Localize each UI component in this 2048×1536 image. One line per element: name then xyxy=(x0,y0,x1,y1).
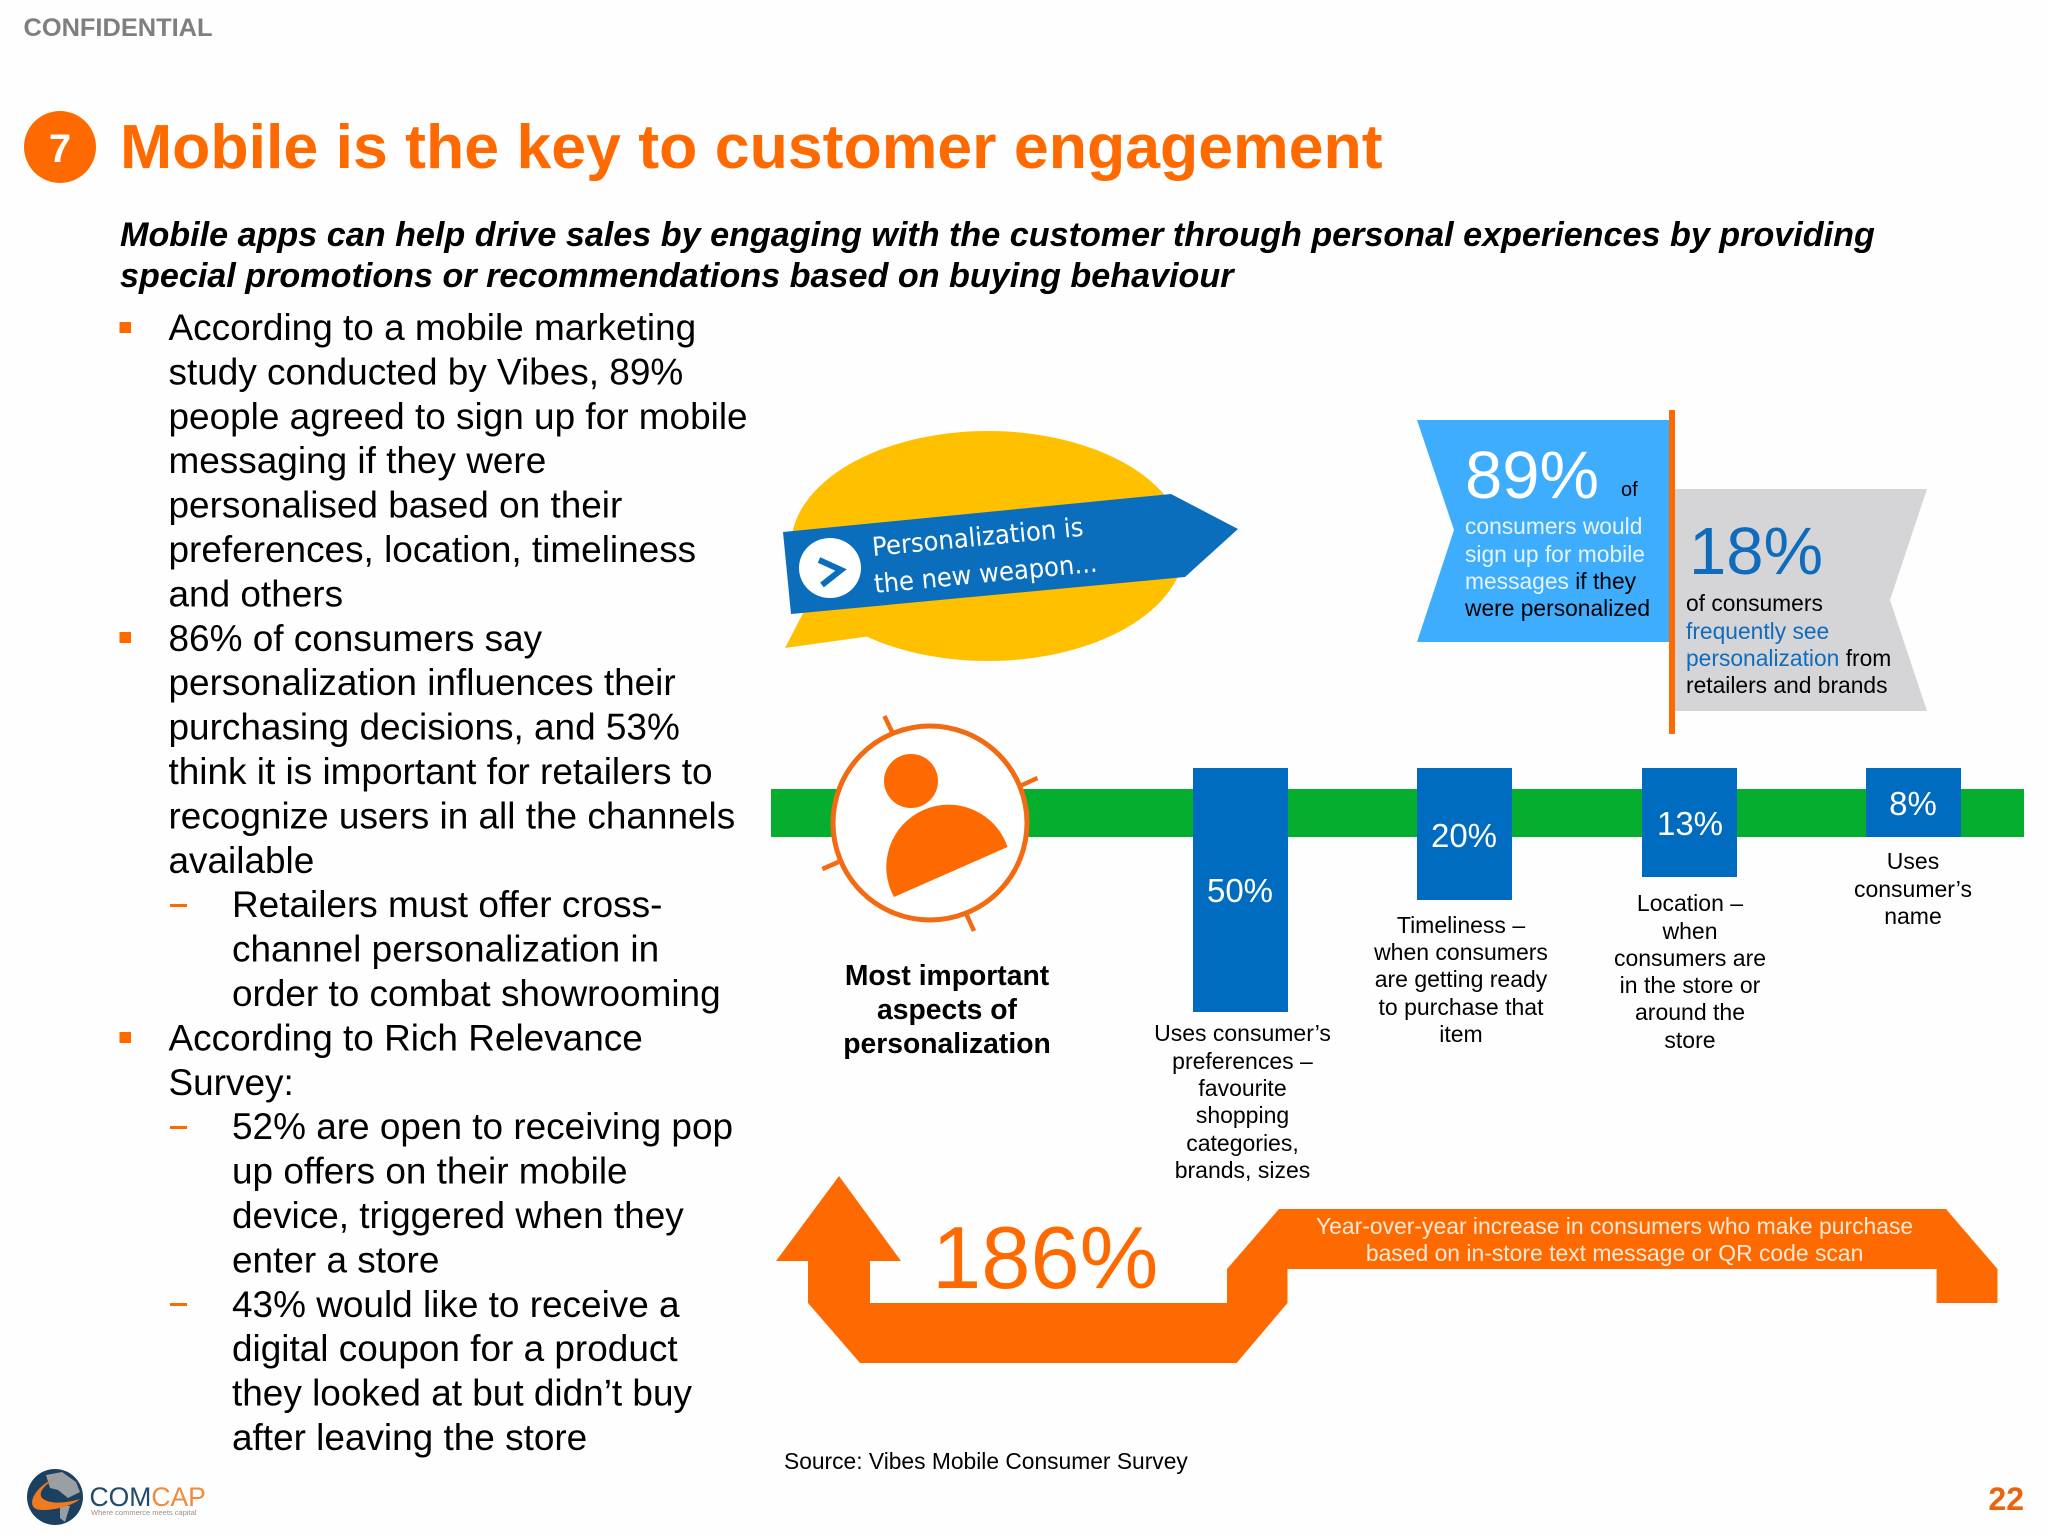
bullet list text block: According to a mobile marketing xyxy=(168,307,696,348)
ribbon text xyxy=(1316,1213,1913,1266)
bullet list text block: recognize users in all the channels xyxy=(168,795,735,836)
bar: 13% location xyxy=(1614,768,1766,1053)
bullet list text block: they looked at but didn’t buy xyxy=(232,1373,693,1414)
bullet list text block: people agreed to sign up for mobile xyxy=(168,396,748,437)
panel: 18% statistic: frequently see xyxy=(1686,618,1829,644)
bullet list text block: preferences, location, timeliness xyxy=(168,529,696,570)
panel: 18% statistic: retailers and brands xyxy=(1686,672,1888,698)
bullet list text block: 86% of consumers say xyxy=(168,618,543,659)
panel: 89% statistic: sign up for mobile xyxy=(1465,541,1645,567)
bullet list text block: 43% would like to receive a xyxy=(232,1284,680,1325)
panel: 18% statistic xyxy=(1675,489,1927,711)
arrow: 186% increase ribbon xyxy=(776,1176,1998,1363)
section number badge: 7 xyxy=(49,127,71,171)
panel: 89% statistic: consumers would xyxy=(1465,513,1642,539)
bullet list text block: after leaving the store xyxy=(232,1417,587,1458)
bullet list text block: study conducted by Vibes, 89% xyxy=(168,351,683,392)
panel: 89% statistic: were personalized xyxy=(1464,595,1650,621)
confidential label: CONFIDENTIAL xyxy=(24,14,213,42)
panel: 18% statistic: 18% xyxy=(1689,514,1823,589)
bar: 8% name: 8% xyxy=(1889,785,1937,822)
heading: most important aspects: aspects of xyxy=(877,993,1018,1025)
bar: 50% preferences: favourite xyxy=(1198,1075,1287,1101)
bullet list text block: purchasing decisions, and 53% xyxy=(168,707,680,748)
bar: 20% timeliness: item xyxy=(1439,1021,1483,1047)
bar: 50% preferences: shopping xyxy=(1196,1102,1289,1128)
bullet list text block: Survey: xyxy=(168,1062,294,1103)
bar: 20% timeliness: 20% xyxy=(1431,817,1497,854)
bar: 13% location: consumers are xyxy=(1614,945,1766,971)
bullet list text block xyxy=(120,307,748,1458)
bar: 20% timeliness: when consumers xyxy=(1373,939,1548,965)
icon: person in circle xyxy=(822,716,1038,931)
bar: 20% timeliness: Timeliness – xyxy=(1397,912,1525,938)
page number: 22 xyxy=(1988,1481,2024,1517)
speech bubble: personalization: the new weapon... xyxy=(873,549,1099,600)
heading: most important aspects: personalization xyxy=(843,1027,1051,1059)
panel: 89% statistic xyxy=(1417,420,1670,642)
ribbon text: based on in-store text message or QR code scan xyxy=(1366,1240,1863,1266)
bar: 50% preferences: preferences – xyxy=(1172,1048,1313,1074)
bar: 50% preferences: categories, xyxy=(1186,1130,1299,1156)
section number badge xyxy=(24,111,96,183)
bullet list text block: up offers on their mobile xyxy=(232,1151,628,1192)
bullet list text block: 52% are open to receiving pop xyxy=(232,1106,733,1147)
bar: 20% timeliness: are getting ready xyxy=(1375,966,1548,992)
heading: most important aspects xyxy=(843,959,1051,1059)
orange vertical divider xyxy=(1669,410,1675,734)
bar: 8% name xyxy=(1854,768,1972,929)
panel: 89% statistic: of xyxy=(1621,479,1638,501)
bar: 13% location: around the xyxy=(1635,999,1745,1025)
bar: 50% preferences xyxy=(1154,768,1331,1183)
subtitle: Mobile apps can help drive sales by engaging with the customer through personal experiences by providing xyxy=(120,216,1875,254)
bullet list text block: order to combat showrooming xyxy=(232,973,721,1014)
bar: 13% location: Location – xyxy=(1637,890,1743,916)
source note: Source: Vibes Mobile Consumer Survey xyxy=(784,1448,1188,1474)
bar: 20% timeliness xyxy=(1373,768,1548,1047)
callout: 186% figure: 186% xyxy=(932,1208,1158,1307)
panel: 18% statistic: personalization from xyxy=(1686,645,1891,671)
speech bubble: personalization: Personalization is xyxy=(871,513,1085,563)
ribbon text: Year-over-year increase in consumers who make purchase xyxy=(1316,1213,1913,1239)
subtitle xyxy=(120,216,1875,295)
bullet list text block: device, triggered when they xyxy=(232,1195,684,1236)
panel: 18% statistic: of consumers xyxy=(1686,590,1823,616)
bullet list text block: messaging if they were xyxy=(168,440,546,481)
panel: 89% statistic: 89% xyxy=(1465,438,1599,513)
logo: Comcap xyxy=(27,1469,206,1525)
bar: 13% location: 13% xyxy=(1657,805,1723,842)
speech bubble: personalization xyxy=(783,431,1238,661)
bar: 50% preferences: brands, sizes xyxy=(1175,1157,1310,1183)
bar: 50% preferences: 50% xyxy=(1207,872,1273,909)
bar: 8% name: Uses xyxy=(1887,848,1939,874)
subtitle: special promotions or recommendations based on buying behaviour xyxy=(120,257,1235,295)
green timeline band xyxy=(771,789,2024,837)
bar: 13% location: when xyxy=(1662,918,1717,944)
bar: 8% name: name xyxy=(1884,903,1942,929)
bullet list text block: enter a store xyxy=(232,1239,439,1280)
logo: Comcap: Where commerce meets capital xyxy=(91,1508,197,1517)
bar: 20% timeliness: to purchase that xyxy=(1379,994,1544,1020)
panel: 89% statistic: messages if they xyxy=(1465,568,1637,594)
bullet list text block: Retailers must offer cross- xyxy=(232,884,662,925)
logo: Comcap: COMCAP xyxy=(90,1482,206,1512)
bullet list text block: channel personalization in xyxy=(232,929,659,970)
bar: 13% location: store xyxy=(1664,1027,1716,1053)
heading: most important aspects: Most important xyxy=(845,959,1050,991)
bullet list text block: personalization influences their xyxy=(168,662,676,703)
bullet list text block: digital coupon for a product xyxy=(232,1328,678,1369)
bullet list text block: think it is important for retailers to xyxy=(168,751,712,792)
bar: 13% location: in the store or xyxy=(1620,972,1761,998)
bullet list text block: According to Rich Relevance xyxy=(168,1017,643,1058)
bullet list text block: available xyxy=(168,840,314,881)
bar: 50% preferences: Uses consumer’s xyxy=(1154,1020,1331,1046)
title: Mobile is the key to customer engagement xyxy=(120,112,1383,182)
bullet list text block: and others xyxy=(168,573,343,614)
bullet list text block: personalised based on their xyxy=(168,485,622,526)
bar: 8% name: consumer’s xyxy=(1854,876,1972,902)
